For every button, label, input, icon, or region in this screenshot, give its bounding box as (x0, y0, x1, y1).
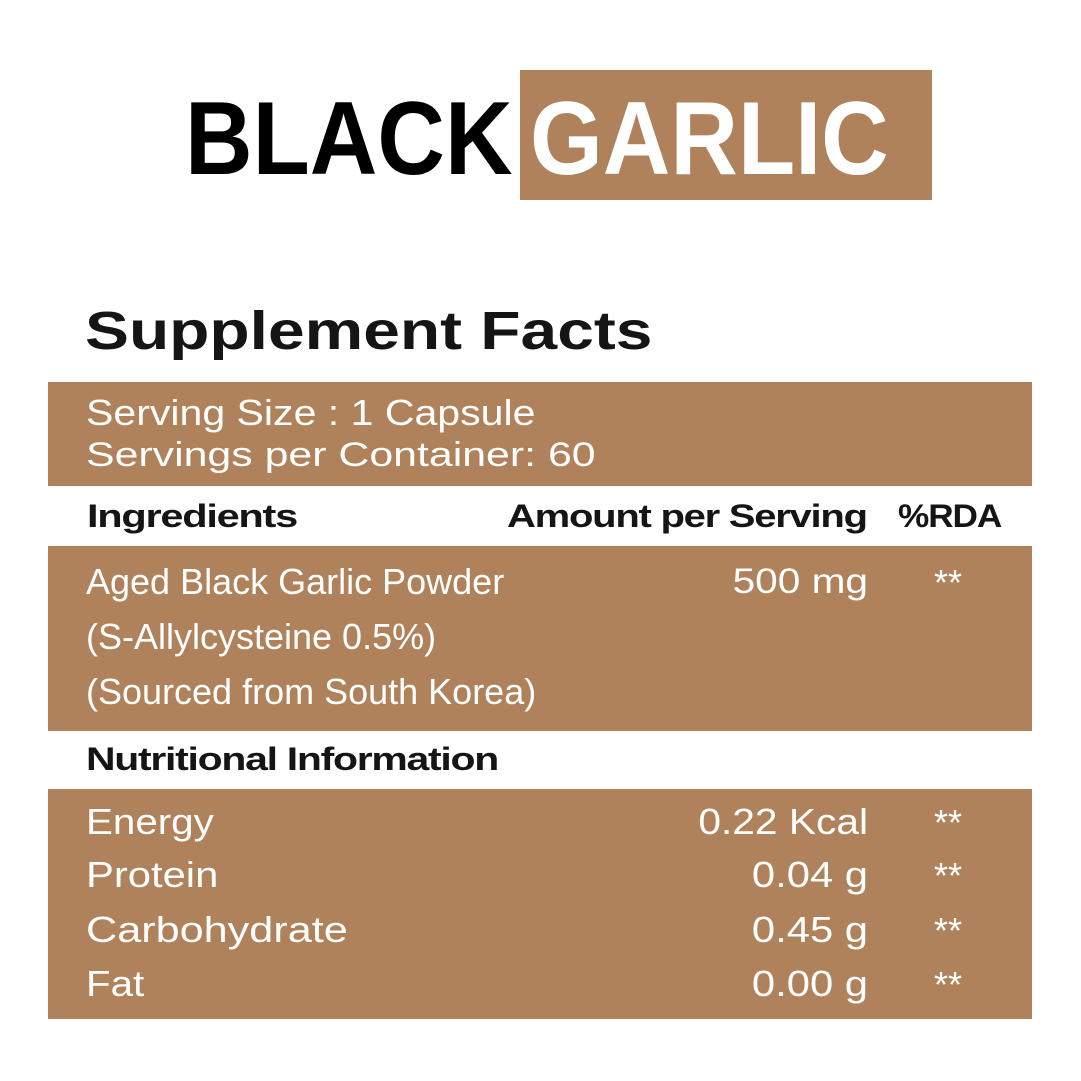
panel: nutrition: 0.04 g (752, 854, 868, 895)
panel: ingredients: (S-Allylcysteine 0.5%) (86, 616, 436, 657)
panel: nutrition: 0.22 Kcal (698, 801, 868, 842)
panel: serving info (48, 382, 1032, 486)
table header (87, 498, 1002, 534)
table header: Ingredients (87, 498, 297, 534)
panel: nutrition: ** (934, 855, 962, 896)
panel: nutrition: ** (934, 964, 962, 1005)
panel: nutrition: Energy (86, 801, 214, 842)
title word BLACK: BLACK (185, 81, 513, 197)
panel: ingredients: Aged Black Garlic Powder (86, 561, 504, 602)
heading: nutritional information: Nutritional Information (86, 741, 498, 777)
panel: ingredients: (Sourced from South Korea) (86, 671, 536, 712)
panel: nutrition: ** (934, 802, 962, 843)
panel: nutrition: Carbohydrate (86, 909, 348, 950)
table header: Amount per Serving (507, 498, 867, 534)
panel: nutrition: Protein (86, 854, 218, 895)
panel: serving info: Servings per Container: 60 (86, 436, 596, 474)
panel: ingredients (48, 546, 1032, 731)
panel: ingredients: 500 mg (733, 562, 868, 601)
panel: serving info: Serving Size : 1 Capsule (86, 392, 535, 433)
panel: nutrition (48, 789, 1032, 1019)
title (185, 70, 932, 200)
table header: %RDA (898, 498, 1001, 534)
panel: nutrition: ** (934, 910, 962, 951)
panel: nutrition: Fat (86, 963, 144, 1004)
heading: supplement facts: Supplement Facts (85, 301, 652, 361)
panel: ingredients: ** (934, 562, 962, 603)
title box GARLIC: GARLIC (530, 81, 889, 197)
panel: nutrition: 0.00 g (752, 963, 868, 1004)
panel: nutrition: 0.45 g (752, 909, 868, 950)
